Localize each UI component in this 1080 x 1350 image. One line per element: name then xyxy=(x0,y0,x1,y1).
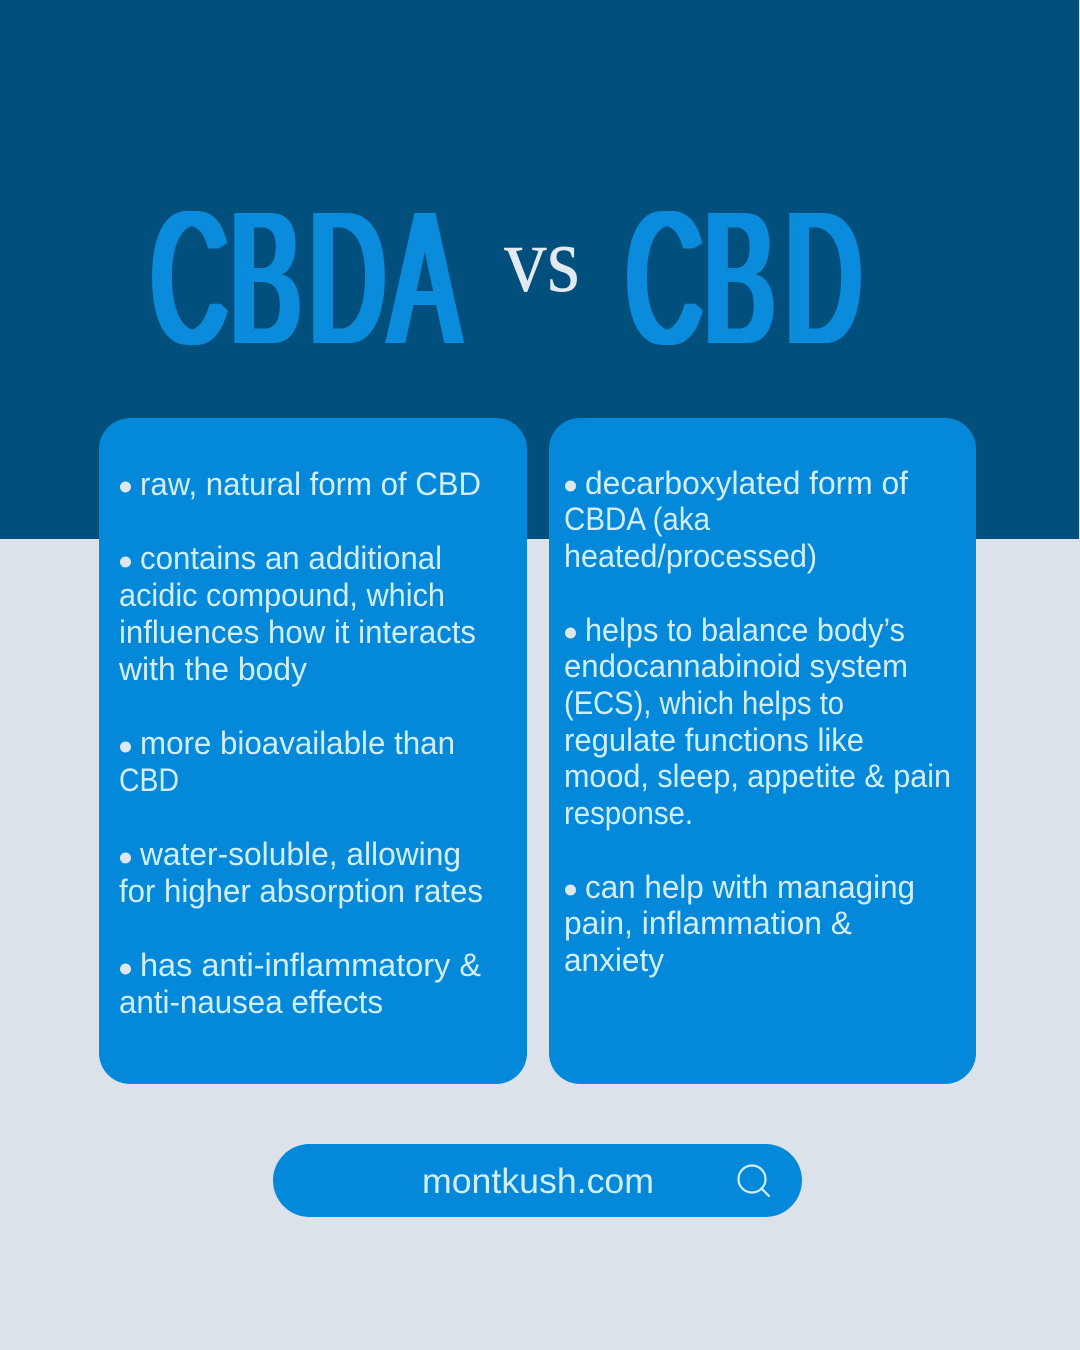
text block: effects xyxy=(119,947,481,1020)
text block: decarboxylated form: decarboxylated form of xyxy=(585,465,908,501)
text block: endocannabinoid system: (ECS), which helps to xyxy=(564,685,844,721)
text block: endocannabinoid system: helps to balance body’s xyxy=(585,612,905,648)
text block: endocannabinoid system: regulate functions like xyxy=(564,722,864,758)
text block: acidic compound: influences how it interacts xyxy=(119,614,476,650)
text block: acidic compound: contains an additional xyxy=(140,540,442,576)
text block: water-soluble: for higher absorption rates xyxy=(119,873,483,909)
search bar xyxy=(273,1144,802,1217)
text block: managing pain: anxiety xyxy=(564,942,664,978)
text block: raw form: raw, natural form of CBD xyxy=(140,466,481,502)
panel background: CBD xyxy=(549,418,976,1084)
background: dark navy upper band xyxy=(0,0,1079,539)
search bar background xyxy=(273,1144,802,1217)
text block: bioavailability: CBD xyxy=(119,762,179,798)
heading: vs: vs xyxy=(504,208,580,312)
text block: acidic compound: acidic compound, which xyxy=(119,577,445,613)
heading: CBDA: CBDA xyxy=(153,173,461,384)
text block: acidic compound: with the body xyxy=(118,651,307,687)
text block: decarboxylated form: heated/processed) xyxy=(564,538,817,574)
text block: managing pain xyxy=(564,869,915,978)
text block: bioavailability: more bioavailable than xyxy=(140,725,455,761)
text block: endocannabinoid system: mood, sleep, appetite & pain xyxy=(564,758,951,794)
text block: endocannabinoid system: response. xyxy=(564,795,693,831)
text block: endocannabinoid system xyxy=(564,612,951,831)
text block: water-soluble: water-soluble, allowing xyxy=(139,836,461,872)
panel background: CBDA xyxy=(99,418,527,1084)
text block: decarboxylated form xyxy=(564,465,908,574)
text block: decarboxylated form: CBDA (aka xyxy=(564,501,710,537)
heading: CBD: CBD xyxy=(628,173,862,384)
website address: montkush.com xyxy=(422,1162,654,1201)
text block: managing pain: can help with managing xyxy=(585,869,915,905)
text block: effects: anti-nausea effects xyxy=(119,984,383,1020)
text block: bioavailability xyxy=(119,725,455,798)
panel: CBDA xyxy=(99,418,527,1084)
icon: magnifying glass xyxy=(738,1166,769,1196)
text block: acidic compound xyxy=(118,540,476,687)
text block: managing pain: pain, inflammation & xyxy=(564,905,852,941)
text block: effects: has anti-inflammatory & xyxy=(140,947,481,983)
text block: endocannabinoid system: endocannabinoid system xyxy=(564,648,908,684)
title xyxy=(153,173,862,384)
panel: CBD xyxy=(549,418,976,1084)
text block: water-soluble xyxy=(119,836,483,909)
